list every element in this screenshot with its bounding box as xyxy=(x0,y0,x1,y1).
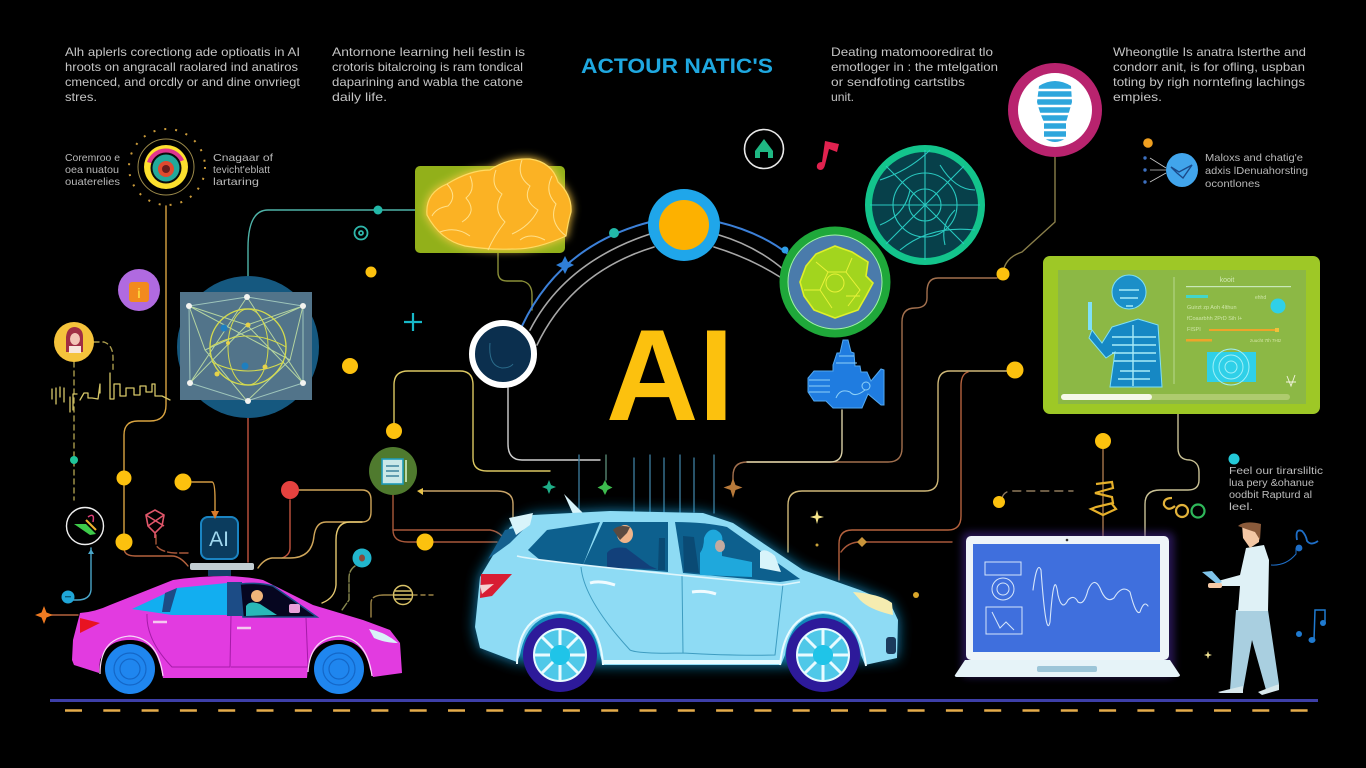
seats xyxy=(658,536,699,573)
car body xyxy=(475,511,898,665)
tablet xyxy=(1202,571,1222,584)
tiny yellow spark xyxy=(1204,651,1212,659)
passenger figure xyxy=(700,530,752,577)
label: right mid: ocontlones xyxy=(1205,178,1260,190)
text block: top second: daily life. xyxy=(332,90,387,104)
label: right mid: adxis lDenuahorsting xyxy=(1205,165,1308,177)
icon: orange spark xyxy=(35,606,53,624)
skeleton figure xyxy=(1088,275,1162,387)
laptop glow xyxy=(962,532,1174,677)
icon: top center orb xyxy=(648,189,720,261)
road dashes xyxy=(65,709,1310,712)
text block: top left xyxy=(65,45,301,104)
readout bars: Guirzt zp Aoh 4lthun xyxy=(1187,305,1237,311)
icon: engine fish xyxy=(808,340,884,408)
arcs over AI xyxy=(522,222,788,345)
roof spoiler xyxy=(509,513,533,535)
torso xyxy=(1218,545,1269,611)
icon: red music note xyxy=(817,141,839,170)
arc node: blue star xyxy=(556,256,574,274)
wheel arch trim xyxy=(100,636,372,676)
mirror xyxy=(760,550,781,572)
arrow heads and stars xyxy=(88,478,919,598)
door lines xyxy=(147,614,308,667)
rear wheel xyxy=(105,644,155,694)
rear hatch glass xyxy=(488,525,528,559)
front window xyxy=(240,583,317,617)
grille xyxy=(886,637,896,654)
label: left of ring: oea nuatou xyxy=(65,164,119,176)
text block: top third: or sendfoting cartstibs xyxy=(831,75,965,89)
label: right of ring: Cnagaar of xyxy=(213,152,273,164)
road line xyxy=(50,699,1318,702)
pants xyxy=(1230,610,1279,690)
rear wheel xyxy=(523,618,597,692)
shoes xyxy=(1218,684,1279,695)
front wheel xyxy=(786,618,860,692)
text block: top left: hroots on angracall raolared ind anatiros xyxy=(65,60,298,74)
webcam xyxy=(1066,539,1068,541)
rear window xyxy=(528,522,600,565)
front window xyxy=(675,522,800,582)
label: right of ring xyxy=(213,152,273,188)
icon: lightbulb badge xyxy=(1008,63,1102,157)
pink car xyxy=(72,576,402,694)
screen frame xyxy=(966,536,1169,660)
arc node: teal dot xyxy=(609,228,619,238)
text block: top left: cmenced, and orcdly or and dine onvriegt xyxy=(65,75,301,89)
tail light xyxy=(480,574,512,598)
label: right of ring: lartaring xyxy=(213,176,259,188)
icon: blue heart node cluster xyxy=(1143,138,1198,187)
icon: striped coin xyxy=(394,586,412,604)
icon: teal dash dot xyxy=(62,590,74,604)
label: left of ring xyxy=(65,152,120,188)
readout bars: FISPI xyxy=(1187,327,1201,333)
node dots xyxy=(70,206,1240,499)
middle window xyxy=(583,522,668,572)
icon: small doc badge xyxy=(369,447,417,495)
readout bars: kooit xyxy=(1220,277,1234,284)
progress bar xyxy=(1061,394,1290,400)
text block: top right: Wheongtile Is anatra lsterthe and xyxy=(1113,45,1306,59)
icon: small teal ring xyxy=(354,226,368,240)
panel: green screen xyxy=(1043,256,1320,414)
sill trim xyxy=(603,660,781,664)
text block: top third: unit. xyxy=(831,90,854,104)
icon: AI chip on pink car xyxy=(201,517,238,559)
panel: rainbow spiral ring xyxy=(129,129,205,205)
head xyxy=(1242,524,1260,548)
icon: chain links xyxy=(1164,498,1204,518)
icon: teal plus xyxy=(404,313,422,331)
text block: top right: toting by righ norntefing lachings xyxy=(1113,75,1305,89)
text block: top third xyxy=(831,45,998,104)
readout bars: zuucht 7th 7Htz xyxy=(1250,338,1282,343)
pillar xyxy=(162,582,243,616)
label: right mid: Maloxs and chatig'e xyxy=(1205,152,1303,164)
label: left of ring: Coremroo e xyxy=(65,152,120,164)
trackpad xyxy=(1037,666,1097,672)
ripple box xyxy=(1207,349,1256,385)
arc node: blue dot xyxy=(782,246,788,254)
door lines xyxy=(581,567,783,655)
text block: top second: Antornone learning heli festin is xyxy=(332,45,525,59)
car roof rail xyxy=(190,563,254,576)
text block: top left: Alh aplerls corectiong ade optioatis in AI xyxy=(65,45,300,59)
divider xyxy=(1173,277,1175,384)
handles xyxy=(590,582,716,594)
arch trim xyxy=(517,612,866,666)
car glow xyxy=(475,511,898,665)
driver xyxy=(246,590,300,616)
car body xyxy=(72,576,402,678)
label: bottom right: Feel our tirarsliltic xyxy=(1229,466,1323,477)
hair xyxy=(1238,522,1261,540)
tail light xyxy=(80,618,100,633)
text block: top right: condorr anit, is for ofling, uspban xyxy=(1113,60,1305,74)
blue car xyxy=(475,494,898,692)
readout bars: ehhd xyxy=(1255,295,1266,301)
text block: top third: emotloger in : the mtelgation xyxy=(831,60,998,74)
laptop xyxy=(955,532,1180,677)
icon: blue music note xyxy=(1296,610,1326,643)
front wheel xyxy=(314,644,364,694)
icon: red leaf xyxy=(146,510,164,538)
screen waveform xyxy=(1033,568,1148,626)
antenna xyxy=(564,494,583,514)
chart: waveform xyxy=(52,373,170,412)
icon: radar web circle xyxy=(868,148,982,262)
text block: top right: empies. xyxy=(1113,90,1162,104)
wheel arches xyxy=(100,640,371,678)
person xyxy=(1202,522,1279,695)
icon: green cell circle xyxy=(784,231,886,333)
handles xyxy=(153,622,251,628)
hand xyxy=(1208,583,1222,588)
panel: neural network xyxy=(177,276,319,418)
headlight xyxy=(369,629,398,643)
driver figure xyxy=(607,525,657,569)
icon: info badge xyxy=(118,269,160,311)
label: bottom right: leel. xyxy=(1229,502,1253,513)
title: ACTOUR NATIC'S xyxy=(581,55,773,78)
label: bottom right: lua pery &ohanue xyxy=(1229,478,1314,489)
text block: top left: stres. xyxy=(65,90,97,104)
connector lines xyxy=(50,156,1199,617)
text block: top second xyxy=(332,45,525,104)
readout bars: fCoaarbhh 2PrD Sih l+ xyxy=(1187,316,1242,322)
label: bottom right: oodbit Rapturd al xyxy=(1229,490,1312,501)
readout bars xyxy=(1186,277,1291,343)
label: right of ring: tevicht'eblatt xyxy=(213,164,270,176)
text block: top right xyxy=(1113,45,1306,104)
label: left of ring: ouaterelies xyxy=(65,176,120,188)
mini glyph xyxy=(1286,375,1296,386)
yellow nodes xyxy=(116,266,1111,550)
icon: AI chip on pink car: AI xyxy=(209,528,229,551)
icon: A in ring xyxy=(744,130,784,168)
panel: brain card xyxy=(415,159,571,253)
label: right mid xyxy=(1205,152,1308,190)
text block: top third: Deating matomooredirat tlo xyxy=(831,45,993,59)
icon: portrait badge xyxy=(54,322,94,362)
laptop base xyxy=(955,660,1180,677)
text block: top second: daparining and wabla the catone xyxy=(332,75,523,89)
icon: info badge: i xyxy=(137,285,141,301)
headlight xyxy=(853,592,893,615)
rear window xyxy=(132,583,227,615)
icon: dark smile ring xyxy=(472,323,534,385)
vertical signal lines xyxy=(579,455,714,513)
icon: blue note squiggle xyxy=(1271,530,1318,565)
screen widgets xyxy=(985,562,1022,634)
icon: coil xyxy=(1091,482,1116,515)
text block: top second: crotoris bitalcroing is ram tondical xyxy=(332,60,523,74)
screen xyxy=(973,544,1160,652)
big label AI: AI xyxy=(606,302,734,448)
icon: teal seed badge xyxy=(352,548,372,568)
label: bottom right xyxy=(1229,466,1323,513)
icon: leaf ring xyxy=(66,508,104,544)
